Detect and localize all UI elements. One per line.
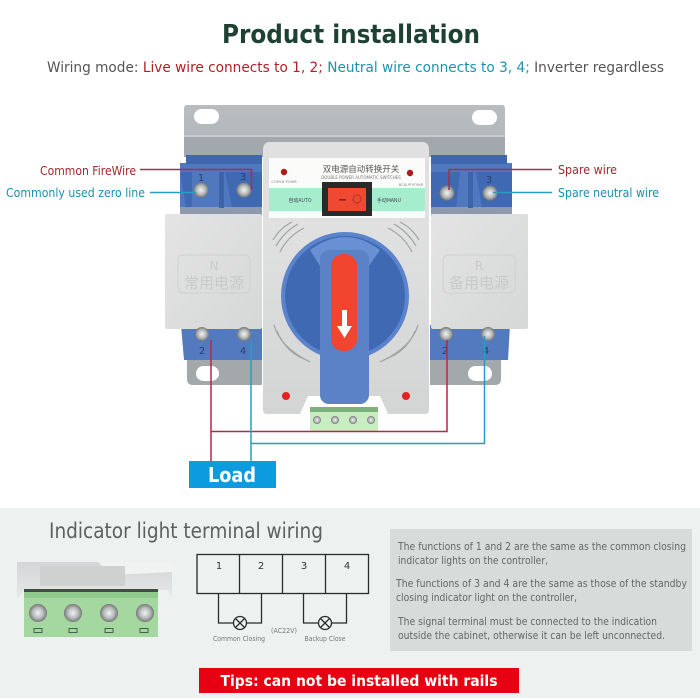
blue terminals top: 3	[240, 172, 246, 183]
notes panel: indicator lights on the controller,	[398, 555, 548, 567]
wiring diagram: Backup Close	[304, 635, 346, 643]
wiring diagram: 3	[301, 561, 307, 572]
left grey cover N: N	[210, 259, 218, 273]
label: common firewire: Common FireWire	[40, 164, 136, 178]
notes panel	[390, 529, 692, 651]
load box: Load	[208, 463, 256, 487]
label plate	[269, 158, 425, 218]
indicator LEDs	[282, 392, 410, 400]
left grey cover N	[165, 214, 262, 329]
blue terminals top: 3	[486, 175, 492, 186]
label plate: 双电源自动转换开关	[323, 163, 400, 175]
tips banner: Tips: can not be installed with rails	[220, 672, 498, 690]
right grey cover R: 备用电源	[449, 272, 509, 293]
live wires	[140, 170, 552, 462]
wiring diagram: 4	[344, 561, 350, 572]
label plate: COMLN POWR	[271, 180, 297, 184]
blue terminals bottom: 2	[199, 346, 205, 357]
terminal block photo	[17, 562, 172, 637]
blue rotary dial	[281, 232, 409, 404]
label: spare wire: Spare wire	[558, 163, 617, 177]
bottom panel: indicator light terminal wiring	[0, 508, 700, 698]
label: zero line: Commonly used zero line	[6, 186, 145, 200]
wiring diagram: (AC22V)	[271, 627, 297, 635]
product photo: dual power switch	[165, 105, 528, 431]
right grey cover R: R	[475, 259, 483, 273]
label plate: DOUBLE POWER AUTOMATIC SWITCHES	[321, 175, 401, 180]
mounting bracket bottom	[187, 350, 501, 385]
blue terminals top	[180, 155, 512, 217]
white arrow on handle	[337, 310, 352, 338]
tips banner	[199, 668, 519, 693]
green indicator terminal block	[310, 407, 378, 431]
wiring diagram: 1	[216, 561, 222, 572]
right grey cover R	[431, 214, 528, 329]
blue terminals bottom: 2	[442, 346, 448, 357]
wiring diagram: Common Closing	[213, 635, 265, 643]
blue terminals top: 1	[198, 173, 204, 184]
notes panel: closing indicator light on the controller,	[396, 592, 577, 604]
section heading: Indicator light terminal wiring	[49, 519, 323, 543]
rocker switch	[322, 182, 372, 216]
title: Product installation	[222, 20, 480, 50]
wiring diagram	[197, 554, 368, 643]
blue terminals bottom	[181, 325, 510, 360]
blue terminals bottom: 4	[240, 346, 246, 357]
notes panel: outside the cabinet, otherwise it can be left unconnected.	[398, 630, 665, 642]
blue terminals bottom: 4	[483, 346, 489, 357]
label plate: 手动MANU	[377, 197, 402, 204]
label plate: BCKUP POWR	[399, 183, 424, 187]
centre switch body	[263, 142, 429, 414]
label plate: 自动AUTO	[288, 197, 312, 204]
label: spare neutral wire: Spare neutral wire	[558, 186, 659, 200]
mounting bracket top	[184, 105, 505, 157]
terminal screws	[194, 182, 498, 341]
wiring diagram: 2	[258, 561, 264, 572]
wiring mode subtitle: Wiring mode: Live wire connects to 1, 2; Neutral wire connects to 3, 4; Inverter regardless	[47, 60, 664, 76]
load box	[189, 461, 276, 488]
left grey cover N: 常用电源	[184, 272, 244, 293]
neutral wires	[150, 192, 552, 462]
notes panel: The signal terminal must be connected to the indication	[397, 616, 657, 628]
